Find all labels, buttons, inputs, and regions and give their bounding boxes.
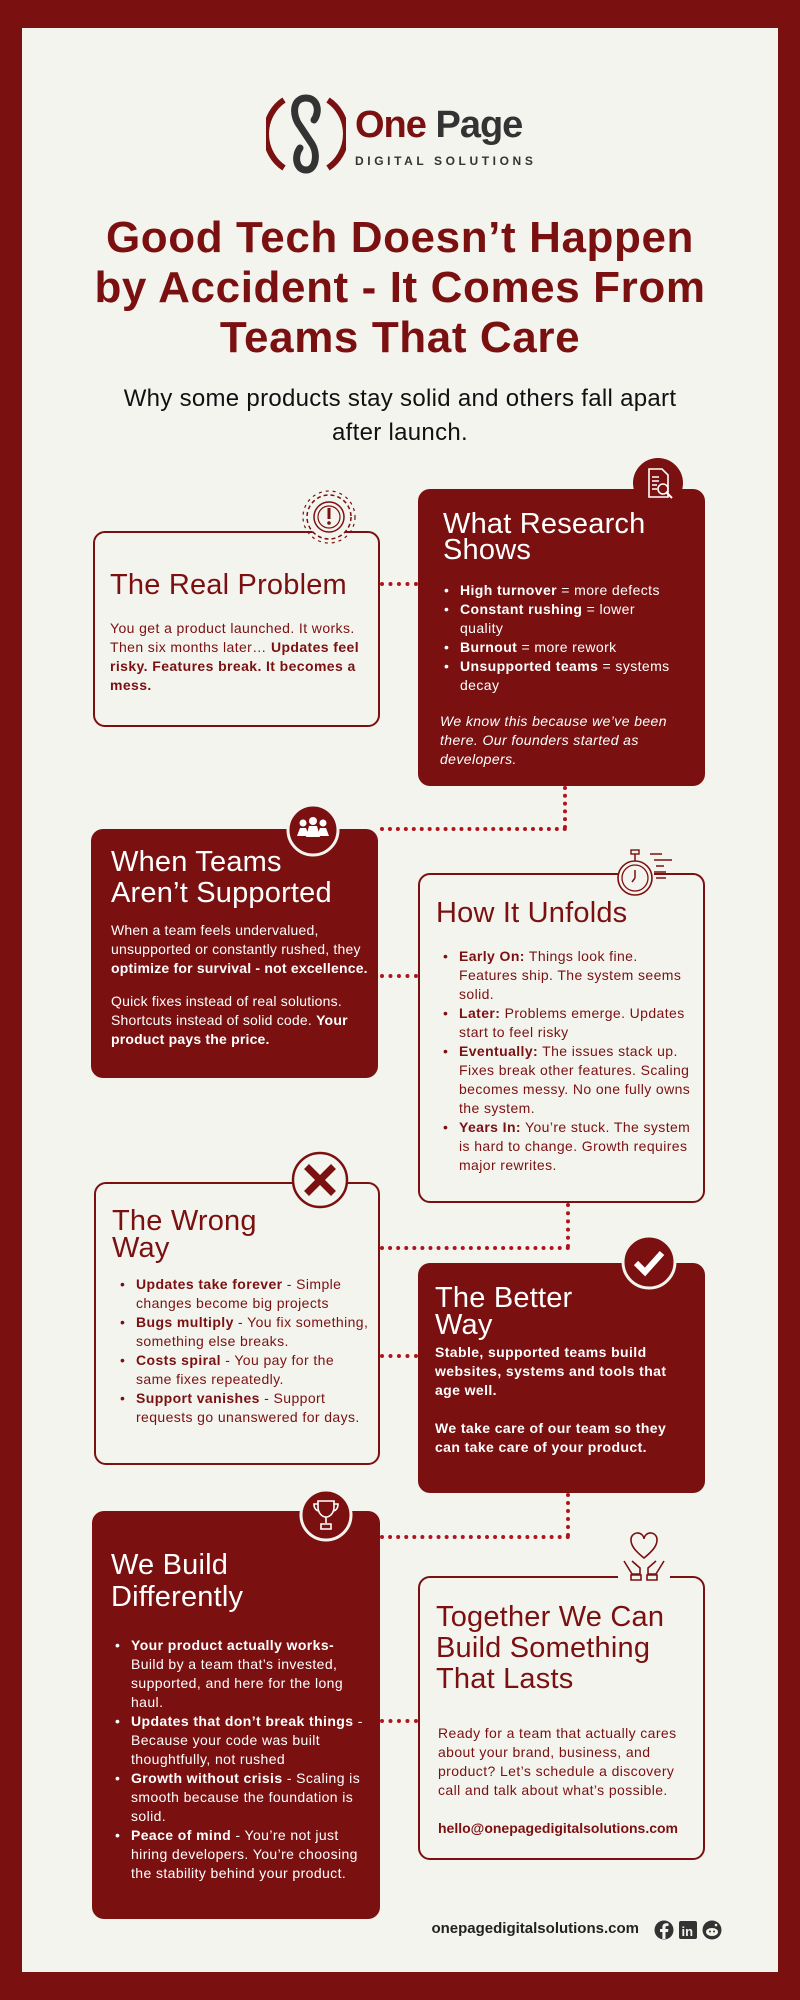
title (94, 213, 706, 362)
panel: how it unfolds (418, 873, 705, 1203)
icon: x mark (292, 1152, 348, 1208)
text block: Quick fixes instead of real solutions. Shortcuts instead of solid code. Your product pays the price. (111, 993, 348, 1047)
icon: logo mark (266, 94, 346, 174)
bullet list: Years In: You’re stuck. The system is hard to change. Growth requires major rewrites. (459, 1119, 690, 1173)
panel: together we can build (418, 1576, 705, 1860)
bullet list: Peace of mind - You’re not just hiring developers. You’re choosing the stability behind your product. (131, 1827, 358, 1881)
text block: Stable, supported teams build websites, systems and tools that age well. (435, 1344, 666, 1398)
text block: You get a product launched. It works. Then six months later… Updates feel risky. Features break. It becomes a mess. (110, 620, 359, 693)
panel: what research shows (418, 489, 705, 786)
icon: trophy (300, 1492, 352, 1542)
icon: gear alert (302, 490, 356, 544)
icons: social (654, 1920, 722, 1940)
logo text: One Page (355, 104, 522, 146)
title: by Accident - It Comes From (94, 263, 706, 312)
heading (111, 846, 332, 909)
heading: Way (112, 1232, 170, 1264)
logo (266, 94, 536, 174)
heading (111, 1549, 243, 1613)
bullet list: Constant rushing = lower (460, 601, 635, 617)
heading: Way (435, 1309, 493, 1341)
title: Teams That Care (220, 313, 580, 362)
icon: check (622, 1238, 676, 1290)
heading: The Better (435, 1282, 572, 1314)
heading: Together We Can (436, 1601, 664, 1633)
bullet list: Unsupported teams = systems decay (460, 658, 670, 693)
subtitle: after launch. (332, 419, 468, 446)
bullet list: Bugs multiply - You fix something, something else breaks. (136, 1314, 368, 1349)
heading (435, 1282, 572, 1341)
email: hello@onepagedigitalsolutions.com (438, 1820, 678, 1836)
bullet list: Eventually: The issues stack up. Fixes break other features. Scaling becomes messy. No one fully owns the system. (459, 1043, 690, 1116)
icon: heart in hands (618, 1532, 670, 1581)
panel: when teams aren't supported (91, 829, 378, 1078)
bullet list: Updates take forever - Simple changes become big projects (136, 1276, 341, 1311)
panel: we build differently (92, 1511, 380, 1919)
subtitle (124, 385, 676, 446)
heading: When Teams (111, 846, 282, 878)
text block: We take care of our team so they can take care of your product. (435, 1420, 666, 1455)
heading: The Real Problem (110, 569, 347, 601)
bullet list: Burnout = more rework (460, 639, 617, 655)
subtitle: Why some products stay solid and others fall apart (124, 385, 676, 412)
connectors (380, 582, 418, 586)
footer website: onepagedigitalsolutions.com (431, 1920, 639, 1937)
bullet list: Support vanishes - Support requests go unanswered for days. (136, 1390, 360, 1425)
bullet list: Costs spiral - You pay for the same fixes repeatedly. (136, 1352, 334, 1387)
text block: When a team feels undervalued, unsupported or constantly rushed, they optimize for survival - not excellence. (111, 922, 368, 976)
bullet list: Updates that don’t break things - Because your code was built thoughtfully, not rushed (131, 1713, 363, 1767)
heading: Differently (111, 1581, 243, 1613)
heading: We Build (111, 1549, 228, 1581)
bullet list (116, 1637, 363, 1881)
heading (443, 508, 645, 566)
title: Good Tech Doesn’t Happen (106, 213, 694, 262)
bullet list: Early On: Things look fine. Features ship. The system seems solid. (459, 948, 681, 1002)
icon: stopwatch (617, 849, 672, 896)
bullet list: Your product actually works- Build by a team that’s invested, supported, and here for the long haul. (131, 1637, 343, 1710)
panel: the real problem (93, 531, 380, 727)
bullet list: Later: Problems emerge. Updates start to feel risky (459, 1005, 685, 1040)
bullet list (444, 948, 690, 1173)
icon: team (286, 806, 340, 856)
heading: Build Something (436, 1632, 650, 1664)
panel: the wrong way (94, 1182, 380, 1465)
heading: That Lasts (436, 1663, 573, 1695)
logo: DIGITAL SOLUTIONS (355, 154, 536, 168)
heading: Shows (443, 534, 531, 566)
heading (112, 1205, 257, 1264)
heading: What Research (443, 508, 645, 540)
icons: social: in (682, 1924, 693, 1939)
heading: The Wrong (112, 1205, 257, 1237)
heading (436, 1601, 664, 1695)
italic note: We know this because we’ve been there. Our founders started as developers. (440, 713, 667, 767)
panel: the better way (418, 1263, 705, 1493)
bullet list: Growth without crisis - Scaling is smooth because the foundation is solid. (131, 1770, 360, 1824)
bullet list (444, 582, 670, 693)
text block: Ready for a team that actually cares about your brand, business, and product? Let’s schedule a discovery call and talk about what’s possible. (438, 1725, 677, 1798)
bullet list (120, 1276, 368, 1425)
heading: How It Unfolds (436, 897, 627, 929)
bullet list: High turnover = more defects (460, 582, 660, 598)
icon: document search (633, 458, 683, 499)
bullet list: quality (460, 620, 503, 636)
heading: Aren’t Supported (111, 877, 332, 909)
